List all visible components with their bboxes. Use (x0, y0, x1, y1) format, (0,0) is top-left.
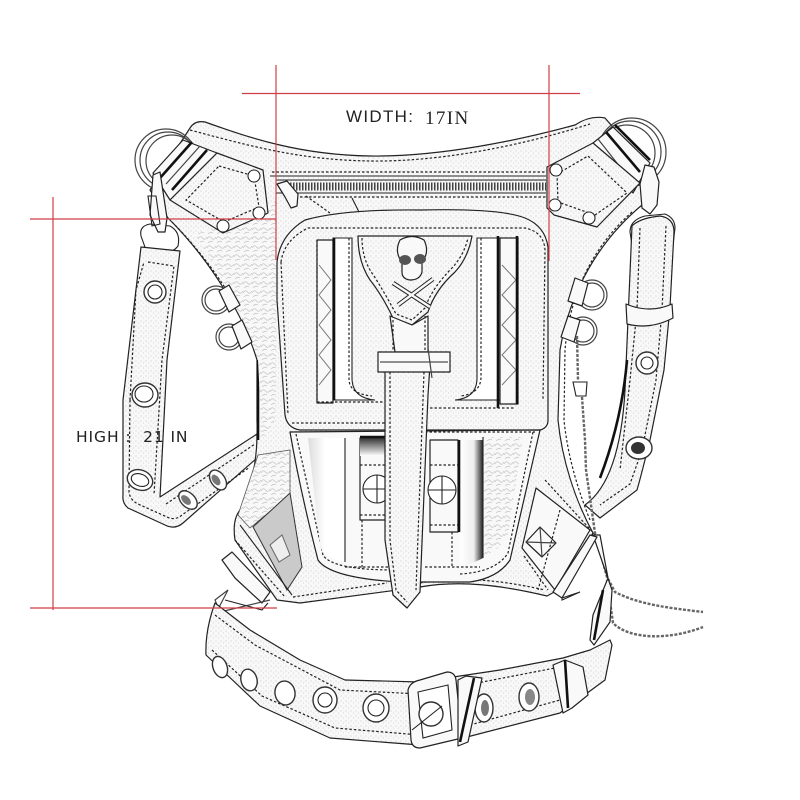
left strap grommets (124, 281, 230, 513)
side lace panel (195, 200, 277, 440)
central buckle strap (378, 348, 450, 608)
width label: WIDTH: (346, 107, 414, 126)
vertical band right (455, 238, 500, 400)
left corner stud (270, 535, 290, 562)
gray corner panel (253, 493, 302, 590)
right corner stud panel (522, 488, 590, 590)
narrow strap under flap (390, 316, 428, 352)
zipper pull (277, 181, 298, 208)
vertical band left (333, 238, 375, 400)
right D-rings (561, 278, 607, 345)
right medallion (428, 476, 456, 504)
bag body (150, 117, 650, 603)
top zipper (270, 172, 546, 214)
left medallion (363, 475, 391, 503)
width label (346, 107, 470, 129)
lower front pocket (290, 430, 540, 582)
belt keeper right (553, 660, 588, 713)
right strap grommets (626, 352, 658, 459)
dimension lines: width (242, 65, 580, 261)
right shoulder strap (585, 214, 675, 518)
left pentagon patch (170, 153, 268, 233)
belt grommets (210, 654, 539, 722)
buckle (408, 672, 482, 748)
waist belt (206, 603, 612, 748)
stud strip right (500, 238, 518, 404)
width label: 17IN (425, 108, 470, 129)
left shoulder strap (123, 224, 257, 527)
center hardware panels (360, 438, 390, 520)
skull flap (358, 236, 472, 325)
height label: HIGH : 21 IN (76, 428, 188, 446)
hanging chain (573, 336, 703, 636)
left window (308, 438, 345, 562)
skull (393, 236, 433, 307)
stud strip left (317, 240, 333, 403)
right rings and webbing (547, 118, 666, 227)
left rings and webbing (135, 129, 268, 233)
dimension lines: height (30, 197, 277, 610)
upper front pocket (277, 210, 548, 432)
right pentagon patch (547, 143, 640, 227)
right window with pattern (480, 437, 523, 558)
left D-rings (202, 285, 252, 350)
lower strap connector hardware (215, 535, 612, 645)
strap keeper (378, 352, 450, 372)
lower seam of upper pocket (317, 402, 514, 408)
